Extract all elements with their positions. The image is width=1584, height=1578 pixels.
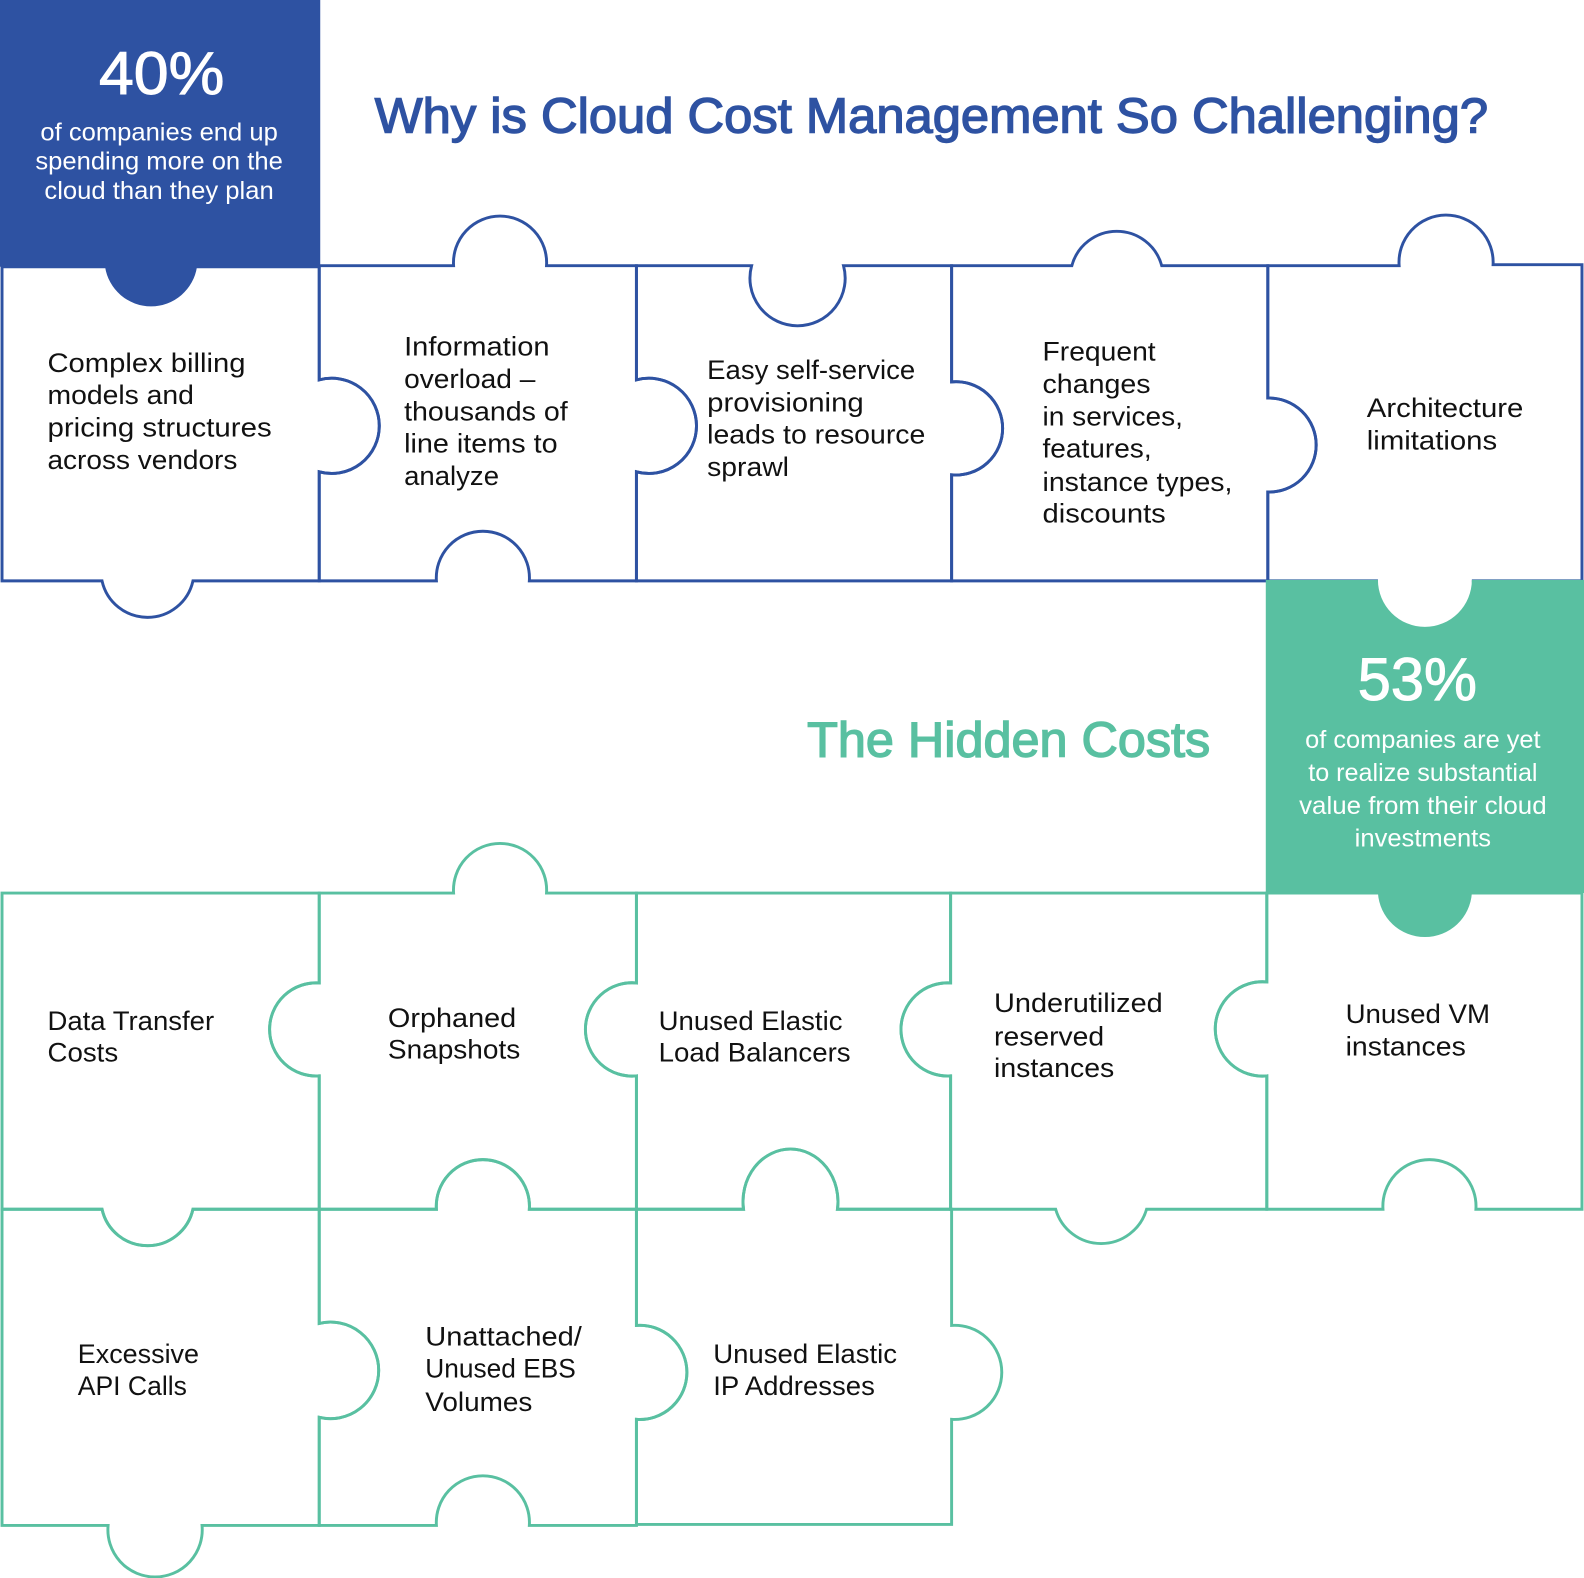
puzzle piece: frequent changes: Frequent <box>1043 336 1156 367</box>
stat box: 40 percent: 40% <box>99 39 224 107</box>
puzzle piece: information overload: analyze <box>404 460 499 491</box>
puzzle piece: frequent changes: in services, <box>1043 400 1183 431</box>
stat box: 53 percent: investments <box>1355 825 1491 853</box>
puzzle piece: information overload: overload – <box>404 363 536 394</box>
puzzle piece: underutilized reserved instances: instances <box>994 1052 1114 1083</box>
stat box: 53 percent: of companies are yet <box>1305 726 1541 754</box>
puzzle piece: unused vm instances: instances <box>1346 1031 1466 1062</box>
puzzle piece: data transfer costs <box>2 893 319 1246</box>
puzzle piece: orphaned snapshots: Snapshots <box>388 1034 520 1065</box>
puzzle piece: frequent changes: changes <box>1043 368 1151 399</box>
puzzle piece: excessive api calls: Excessive <box>78 1338 199 1369</box>
puzzle piece: underutilized reserved instances: Underutilized <box>994 987 1163 1018</box>
puzzle piece: unused elastic load balancers: Load Balancers <box>659 1037 851 1068</box>
puzzle piece: information overload: Information <box>404 331 550 362</box>
puzzle piece: frequent changes <box>952 231 1316 581</box>
stat box: 40 percent: of companies end up <box>40 118 278 146</box>
puzzle piece: data transfer costs: Costs <box>47 1037 118 1068</box>
puzzle piece: unattached ebs volumes <box>319 1160 687 1525</box>
puzzle piece: unused elastic ip addresses: IP Addresses <box>713 1370 875 1401</box>
puzzle piece: information overload: line items to <box>404 428 558 459</box>
puzzle piece: unused elastic load balancers: Unused Elastic <box>659 1005 843 1036</box>
puzzle piece: underutilized reserved instances <box>901 893 1267 1244</box>
puzzle piece: self-service sprawl: sprawl <box>707 451 789 482</box>
puzzle piece: unused elastic ip addresses: Unused Elastic <box>713 1338 897 1369</box>
puzzle piece: complex billing: Complex billing <box>47 347 245 378</box>
puzzle piece: frequent changes: discounts <box>1043 497 1166 528</box>
puzzle piece: unused elastic load balancers <box>585 893 951 1209</box>
puzzle piece: underutilized reserved instances: reserved <box>994 1021 1104 1052</box>
puzzle piece: architecture limitations: Architecture <box>1367 392 1523 423</box>
stat box: 53 percent <box>1266 580 1584 937</box>
puzzle piece: information overload: thousands of <box>404 395 568 426</box>
puzzle piece: architecture limitations <box>1268 215 1582 581</box>
puzzle piece: information overload <box>319 216 697 581</box>
heading: the hidden costs: The Hidden Costs <box>807 713 1210 768</box>
puzzle piece: complex billing: models and <box>47 379 194 410</box>
puzzle piece: orphaned snapshots: Orphaned <box>388 1002 516 1033</box>
puzzle piece: self-service sprawl <box>636 266 1003 581</box>
stat box: 53 percent: 53% <box>1358 645 1477 713</box>
puzzle piece: architecture limitations: limitations <box>1367 425 1497 456</box>
stat box: 40 percent: cloud than they plan <box>44 177 274 205</box>
puzzle piece: complex billing: across vendors <box>47 444 237 475</box>
stat box: 40 percent <box>0 0 320 306</box>
puzzle piece: complex billing <box>2 267 379 617</box>
puzzle piece: unused vm instances: Unused VM <box>1346 998 1490 1029</box>
puzzle piece: unused elastic ip addresses <box>636 1149 1002 1524</box>
puzzle piece: self-service sprawl: leads to resource <box>707 419 925 450</box>
stat box: 40 percent: spending more on the <box>35 148 283 176</box>
puzzle piece: orphaned snapshots <box>270 843 636 1209</box>
puzzle piece: data transfer costs: Data Transfer <box>47 1005 214 1036</box>
puzzle piece: unattached ebs volumes: Unused EBS <box>425 1352 576 1383</box>
puzzle piece: self-service sprawl: provisioning <box>707 387 864 418</box>
section: the hidden costs <box>2 580 1584 1577</box>
section: why is cloud cost management so challenging <box>0 0 1582 617</box>
puzzle piece: complex billing: pricing structures <box>47 411 272 442</box>
puzzle piece: frequent changes: instance types, <box>1043 466 1232 497</box>
puzzle piece: frequent changes: features, <box>1043 433 1152 464</box>
puzzle piece: unattached ebs volumes: Unattached/ <box>425 1321 582 1352</box>
puzzle piece: unused vm instances <box>1215 893 1582 1209</box>
title: Why is Cloud Cost Management So Challenging? <box>375 88 1488 143</box>
puzzle piece: excessive api calls <box>2 1209 379 1577</box>
stat box: 53 percent: to realize substantial <box>1308 759 1538 787</box>
puzzle piece: self-service sprawl: Easy self-service <box>707 354 915 385</box>
stat box: 53 percent: value from their cloud <box>1299 792 1547 820</box>
puzzle piece: unattached ebs volumes: Volumes <box>425 1386 532 1417</box>
puzzle piece: excessive api calls: API Calls <box>78 1370 187 1401</box>
